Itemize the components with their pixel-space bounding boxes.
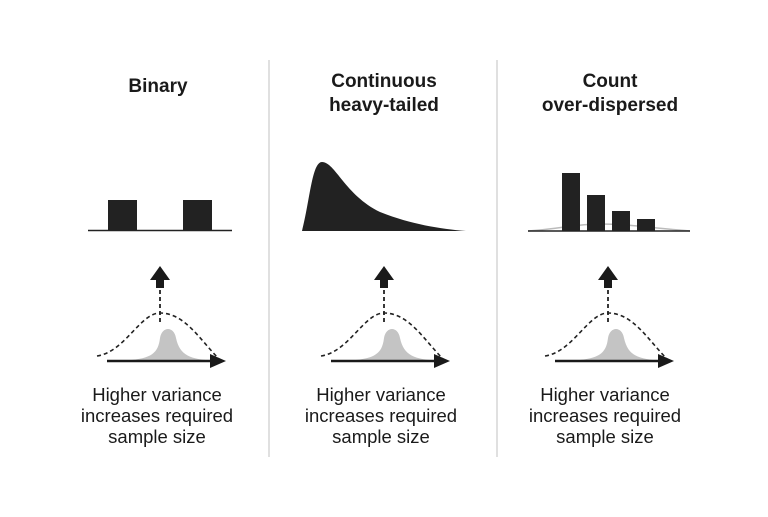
chart: binary bars	[88, 200, 232, 230]
text: col1: Higher variance	[92, 384, 222, 405]
text: col2	[305, 384, 457, 447]
text: col1: sample size	[108, 426, 206, 447]
text: col3: increases required	[529, 405, 681, 426]
text: col2: increases required	[305, 405, 457, 426]
text: col1: increases required	[81, 405, 233, 426]
title: Count over-dispersed: Count	[583, 71, 638, 92]
chart: count bars	[528, 173, 690, 231]
icon: variance 2	[321, 266, 450, 368]
title: Count over-dispersed	[542, 71, 678, 116]
text: col3: sample size	[556, 426, 654, 447]
text: col2: sample size	[332, 426, 430, 447]
title: Count over-dispersed: over-dispersed	[542, 95, 678, 116]
icon: variance 1	[97, 266, 226, 368]
text: col1	[81, 384, 233, 447]
title: Continuous heavy-tailed: heavy-tailed	[329, 95, 439, 116]
icon: variance 3	[545, 266, 674, 368]
text: col3: Higher variance	[540, 384, 670, 405]
text: col3	[529, 384, 681, 447]
title: Continuous heavy-tailed	[329, 71, 439, 116]
title: Continuous heavy-tailed: Continuous	[331, 71, 437, 92]
title: Binary: Binary	[128, 76, 188, 97]
chart: heavy-tailed density	[302, 162, 466, 231]
text: col2: Higher variance	[316, 384, 446, 405]
